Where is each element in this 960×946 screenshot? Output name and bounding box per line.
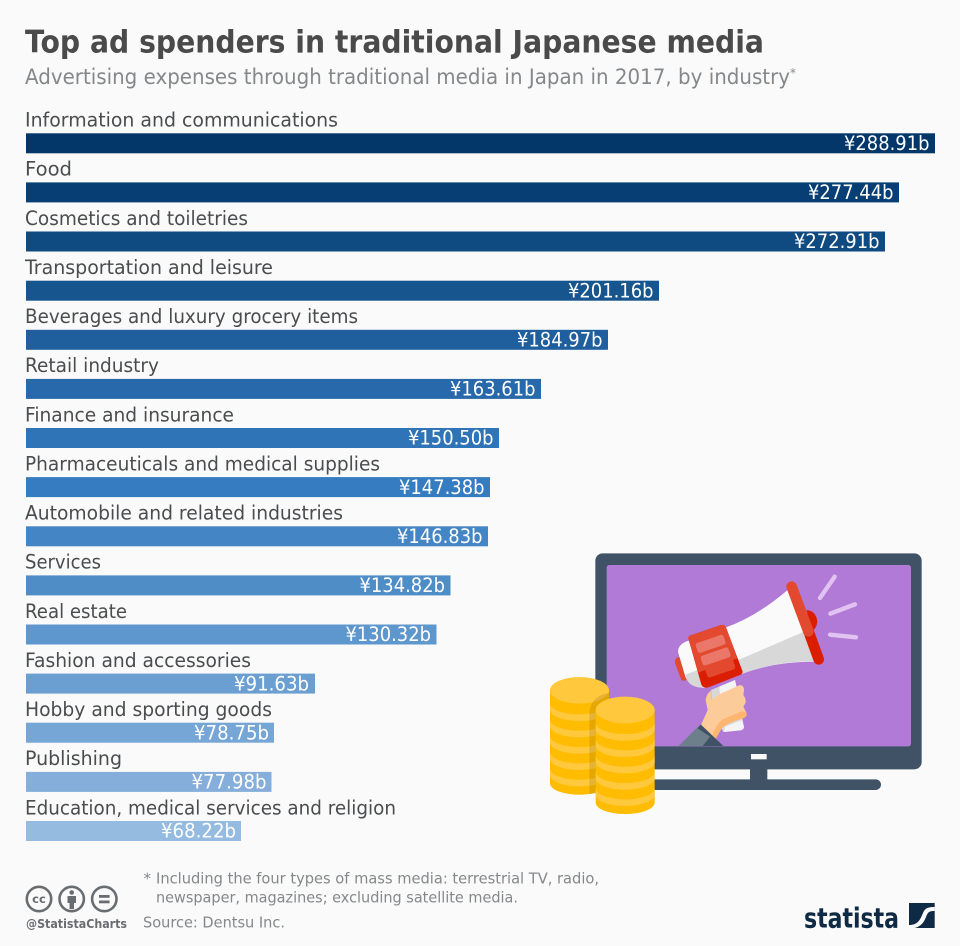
icon: creative commons licence badges: cc bbox=[32, 892, 46, 906]
icon: megaphone body bbox=[675, 587, 819, 688]
row: Automobile and related industries: ¥146.83b bbox=[397, 525, 482, 548]
row: Transportation and leisure: Transportation and leisure bbox=[24, 256, 273, 279]
row: Publishing: Publishing bbox=[25, 747, 122, 770]
row: Real estate: Real estate bbox=[25, 600, 127, 623]
row: Food bbox=[25, 158, 899, 204]
row: Hobby and sporting goods: Hobby and sporting goods bbox=[25, 698, 272, 721]
row: Services: ¥134.82b bbox=[360, 574, 445, 597]
footnote bbox=[144, 870, 599, 906]
row: Education, medical services and religion: ¥68.22b bbox=[161, 820, 236, 843]
row: Services bbox=[25, 551, 450, 597]
row: Cosmetics and toiletries: Cosmetics and toiletries bbox=[25, 207, 248, 230]
footnote: Including the four types of mass media: terrestrial TV, radio, bbox=[156, 870, 599, 888]
title: Top ad spenders in traditional Japanese media bbox=[25, 25, 764, 61]
subtitle asterisk: * bbox=[790, 66, 796, 80]
source: Source: Dentsu Inc. bbox=[143, 914, 285, 932]
row: Fashion and accessories: Fashion and accessories bbox=[25, 649, 251, 672]
row: Finance and insurance bbox=[25, 403, 499, 450]
row: Pharmaceuticals and medical supplies: ¥147.38b bbox=[399, 476, 484, 499]
row: Fashion and accessories: ¥91.63b bbox=[234, 672, 309, 695]
row: Transportation and leisure bbox=[24, 256, 659, 302]
row: Education, medical services and religion bbox=[25, 796, 396, 843]
row: Retail industry bbox=[25, 354, 541, 401]
row: Pharmaceuticals and medical supplies: Pharmaceuticals and medical supplies bbox=[25, 452, 380, 475]
row: Information and communications: ¥288.91b bbox=[844, 132, 930, 155]
icon: television bbox=[595, 553, 922, 790]
row: Automobile and related industries bbox=[25, 502, 488, 548]
statista wordmark: statista bbox=[804, 902, 899, 935]
icon: statista logo bbox=[909, 903, 935, 928]
row: Real estate: ¥130.32b bbox=[346, 623, 431, 646]
illustration: TV, megaphone and coins bbox=[550, 553, 922, 814]
row: Publishing bbox=[25, 747, 272, 794]
row: Automobile and related industries: Automobile and related industries bbox=[25, 502, 343, 525]
row: Beverages and luxury grocery items: Beverages and luxury grocery items bbox=[25, 305, 358, 328]
row: Pharmaceuticals and medical supplies bbox=[25, 452, 490, 499]
row: Cosmetics and toiletries: ¥272.91b bbox=[794, 230, 880, 253]
row: Hobby and sporting goods: ¥78.75b bbox=[194, 721, 269, 744]
row: Retail industry: ¥163.61b bbox=[450, 378, 536, 401]
icon: left coin stack bbox=[550, 677, 609, 795]
row: Beverages and luxury grocery items bbox=[25, 305, 608, 352]
row: Education, medical services and religion: Education, medical services and religion bbox=[25, 796, 396, 819]
footnote: newspaper, magazines; excluding satellite media. bbox=[156, 888, 518, 906]
row: Real estate bbox=[25, 600, 436, 646]
row: Information and communications bbox=[25, 109, 935, 155]
icon: megaphone sound rays bbox=[820, 577, 856, 637]
bar chart bbox=[24, 109, 935, 843]
row: Finance and insurance: Finance and insurance bbox=[25, 403, 234, 426]
row: Publishing: ¥77.98b bbox=[192, 771, 266, 794]
row: Transportation and leisure: ¥201.16b bbox=[568, 279, 654, 302]
row: Beverages and luxury grocery items: ¥184.97b bbox=[517, 328, 602, 352]
icon: creative commons licence badges bbox=[27, 887, 117, 911]
row: Food: ¥277.44b bbox=[808, 181, 894, 204]
row: Hobby and sporting goods bbox=[25, 698, 274, 744]
row: Finance and insurance: ¥150.50b bbox=[408, 427, 494, 450]
row: Services: Services bbox=[25, 551, 101, 574]
row: Information and communications: Information and communications bbox=[25, 109, 338, 132]
attribution handle: @StatistaCharts bbox=[26, 917, 127, 931]
subtitle: Advertising expenses through traditional media in Japan in 2017, by industry bbox=[25, 65, 790, 90]
row: Retail industry: Retail industry bbox=[25, 354, 159, 377]
icon: hand holding megaphone bbox=[679, 680, 747, 746]
icon: right coin stack bbox=[596, 697, 655, 814]
row: Fashion and accessories bbox=[25, 649, 315, 695]
row: Cosmetics and toiletries bbox=[25, 207, 885, 253]
footnote: * bbox=[144, 870, 152, 888]
row: Food: Food bbox=[25, 158, 72, 181]
